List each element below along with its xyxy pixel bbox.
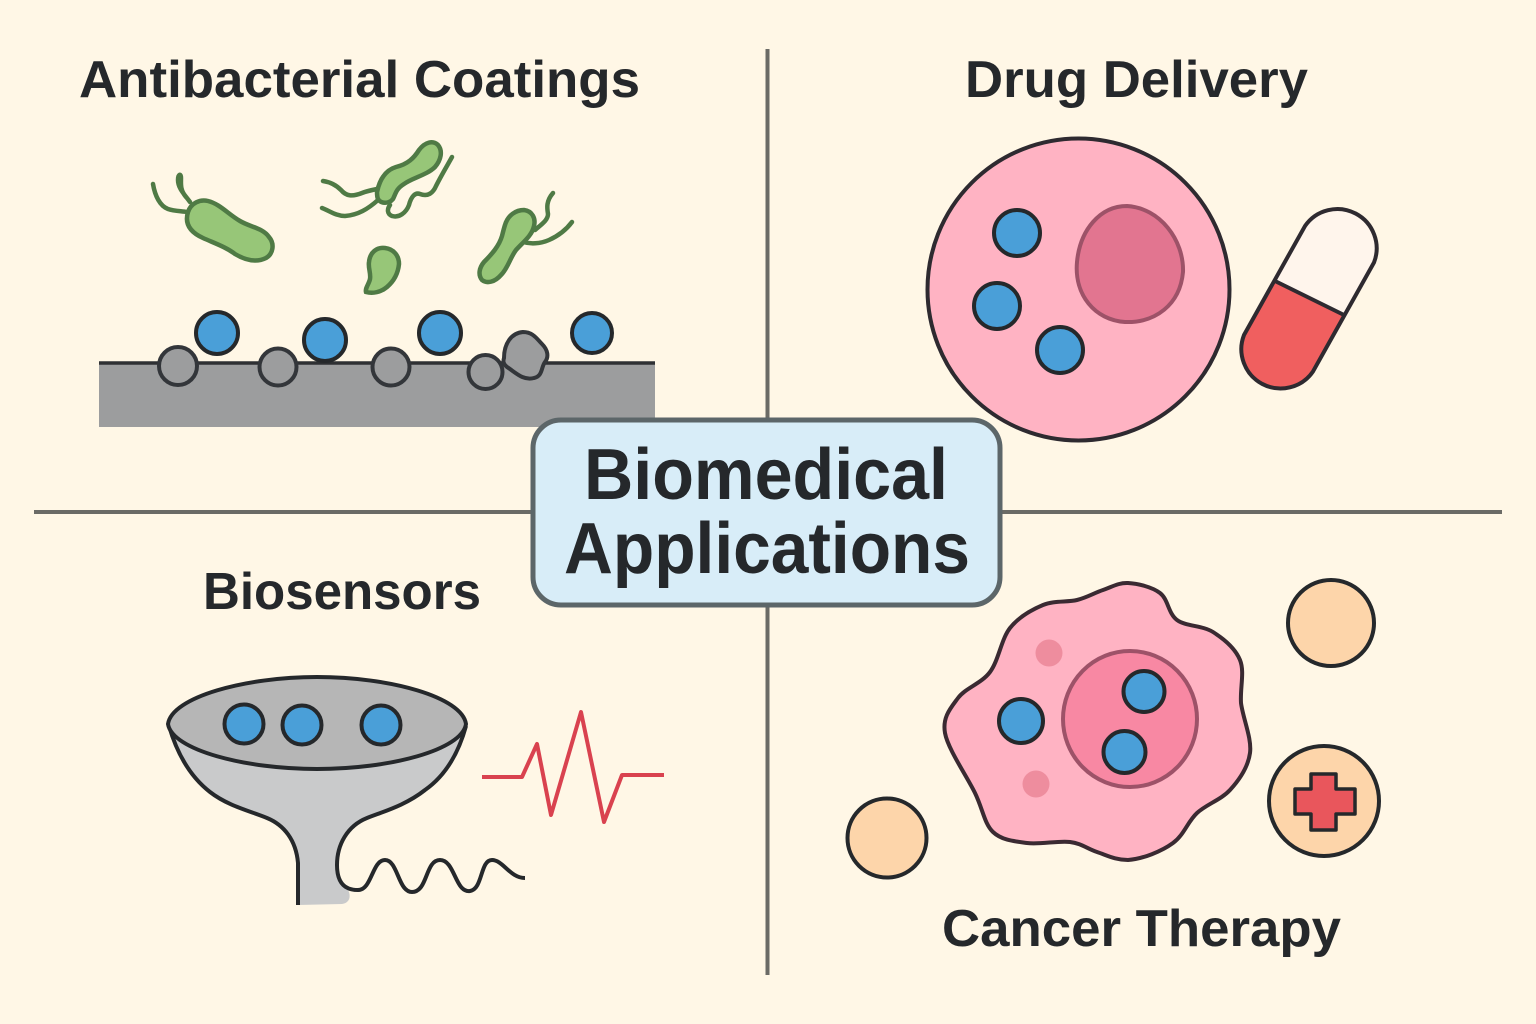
grey nanoparticles [159, 332, 547, 389]
illustration: cancer therapy [848, 580, 1379, 878]
organelles [1022, 640, 1062, 798]
heading: Cancer Therapy: Cancer Therapy [942, 900, 1341, 958]
illustration: drug delivery cell and capsule [928, 138, 1377, 440]
icon: bacterium with flagella, left [153, 175, 273, 261]
icon: bacterium with flagella, top [322, 142, 452, 216]
icon: small bacterium [366, 248, 399, 293]
heading: Drug Delivery: Drug Delivery [965, 51, 1308, 109]
central title box: Applications [564, 509, 970, 589]
sensor nanoparticles [224, 704, 400, 744]
drug nanoparticles [974, 210, 1083, 373]
icon: funnel body [169, 726, 466, 905]
illustration: antibacterial surface [99, 142, 655, 427]
icon: funnel rim [168, 677, 466, 769]
healthy cells [848, 580, 1379, 878]
icon: cell nucleus [1063, 651, 1197, 787]
heading: Biosensors: Biosensors [203, 563, 481, 621]
blue nanoparticles [196, 312, 612, 361]
drug nanoparticles [999, 671, 1164, 773]
icon: bacterium with flagella, right [480, 193, 572, 282]
central title box [533, 420, 1000, 605]
icon: nucleus [1077, 206, 1183, 322]
icon: medical cross [1295, 774, 1355, 830]
central title box: Biomedical [584, 435, 948, 515]
illustration: biosensor funnel and signal [168, 677, 664, 905]
chart: signal trace [482, 712, 664, 822]
heading: Antibacterial Coatings: Antibacterial Coatings [79, 51, 640, 109]
icon: cancer cell [944, 583, 1250, 860]
coating slab [99, 363, 655, 427]
icon: capsule [1241, 209, 1377, 388]
icon: cell [928, 138, 1230, 440]
